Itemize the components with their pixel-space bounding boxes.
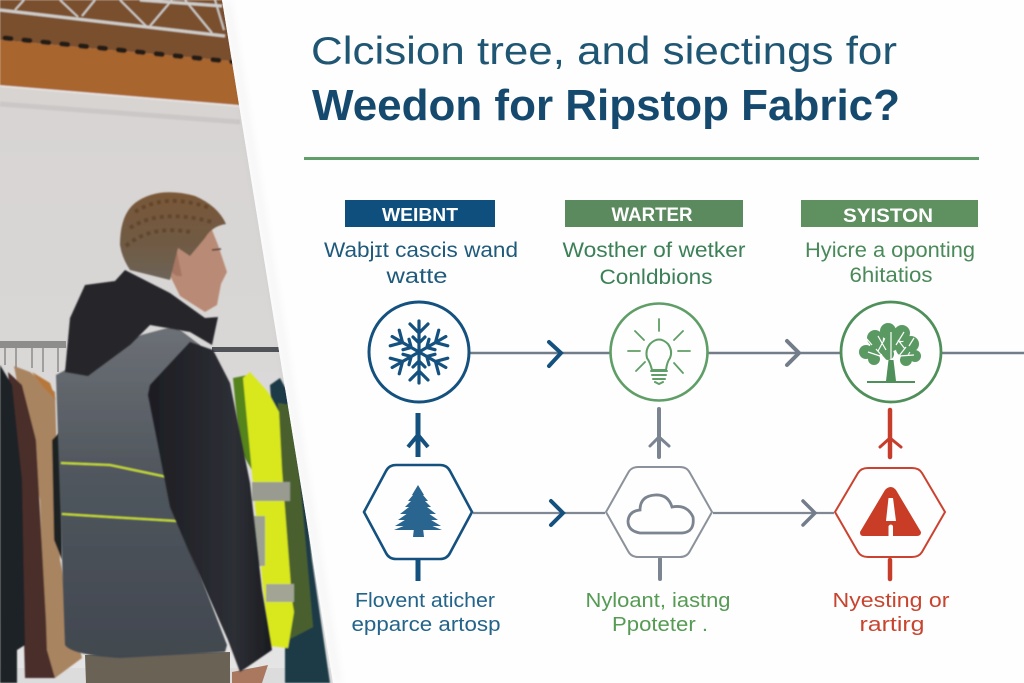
column heading: system: 6hitatios: [850, 264, 932, 287]
head: [120, 192, 227, 312]
caption: blue outcome: [352, 590, 500, 636]
title: Clcision tree, and siectings for: [311, 30, 897, 73]
column heading: system: [801, 200, 978, 287]
caption: red outcome: rartirg: [860, 614, 924, 636]
vest: [56, 326, 227, 658]
icon: light bulb in circle: [610, 304, 708, 400]
clothes rail right: [212, 347, 284, 352]
clothes rail left: [0, 341, 66, 372]
sleeve: [148, 342, 272, 672]
caption: blue outcome: Flovent aticher: [355, 590, 495, 612]
caption: green outcome: Ppoteter .: [612, 614, 708, 636]
column heading: system: Hyicre a oponting: [805, 239, 975, 262]
column heading: weight: watte: [385, 265, 448, 288]
caption: red outcome: [832, 590, 950, 636]
icon: tree in circle: [841, 302, 941, 402]
connector: top row: [470, 341, 1024, 366]
caption: green outcome: Nyloant, iastng: [586, 590, 730, 612]
photo: man viewing jackets on a rack: [0, 0, 340, 683]
icon: warning triangle in hexagon: [835, 468, 945, 557]
caption: green outcome: [586, 590, 730, 636]
trousers: [85, 652, 230, 683]
caption: blue outcome: epparce artosp: [352, 614, 500, 636]
hanging jackets right: [233, 372, 330, 683]
hand: [232, 665, 268, 683]
column heading: weight: [324, 200, 518, 288]
icon: cloud in hexagon: [606, 467, 712, 557]
column heading: water: WARTER: [612, 205, 693, 226]
column heading: weight: Wabjɪt cascis wand: [324, 239, 518, 262]
ceiling: [0, 0, 240, 122]
column heading: water: [562, 200, 746, 289]
icon: snowflake in circle: [369, 302, 469, 402]
connector: bottom row: [473, 501, 834, 525]
hanging clothes left: [0, 365, 82, 683]
arrow: red up: [880, 410, 901, 579]
title: Weedon for Ripstop Fabric?: [312, 81, 900, 130]
title: [311, 30, 900, 130]
column heading: water: Conldbions: [600, 266, 712, 289]
hood: [65, 270, 218, 376]
column heading: weight: WEIBNT: [382, 204, 459, 225]
arrow: blue up: [408, 413, 428, 581]
icon: pine tree in hexagon: [364, 465, 472, 559]
column heading: water: Wosther of wetker: [562, 239, 746, 262]
arrow: gray up: [650, 409, 669, 579]
column heading: system: SYISTON: [843, 205, 933, 227]
panel: white content sheet: [222, 0, 1024, 683]
floor: [0, 668, 340, 683]
caption: red outcome: Nyesting or: [832, 590, 950, 612]
